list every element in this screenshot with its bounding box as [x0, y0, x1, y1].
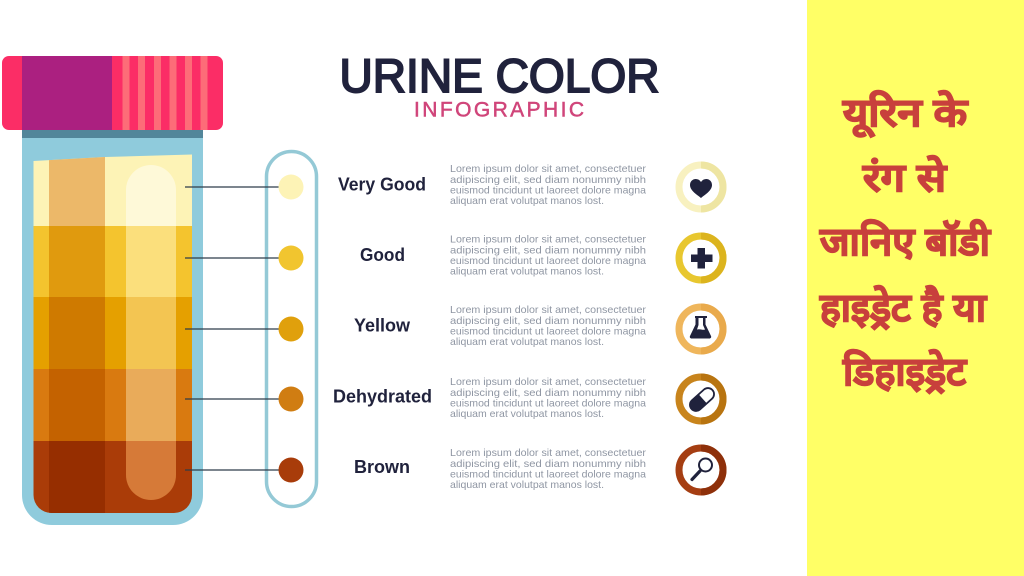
description: adipiscing elit, sed diam nonummy nibh	[450, 387, 646, 399]
jar lid	[2, 56, 223, 130]
description: euismod tincidunt ut laoreet dolore magna	[450, 468, 646, 480]
description: aliquam erat volutpat manos lost.	[450, 336, 604, 348]
description: Lorem ipsum dolor sit amet, consectetuer	[450, 376, 647, 388]
description: adipiscing elit, sed diam nonummy nibh	[450, 458, 646, 470]
row: Very Good	[338, 163, 647, 207]
liquid colour bands	[33, 150, 193, 514]
icon: magnifier	[679, 448, 723, 492]
description	[450, 163, 647, 207]
row: Very Good: Very Good	[338, 174, 426, 194]
hindi headline	[819, 90, 992, 394]
connector lines	[185, 187, 279, 470]
description	[450, 304, 647, 348]
title: URINE COLOR	[340, 49, 660, 102]
description: Lorem ipsum dolor sit amet, consectetuer	[450, 163, 647, 175]
hindi headline: यूरिन के	[842, 90, 969, 138]
description	[450, 376, 647, 420]
row: Brown: Brown	[354, 457, 410, 477]
description	[450, 447, 647, 491]
panel: specimen jar	[2, 56, 223, 525]
row: Dehydrated: Dehydrated	[333, 386, 432, 406]
description: Lorem ipsum dolor sit amet, consectetuer	[450, 234, 647, 246]
row: Good: Good	[360, 245, 405, 265]
hindi headline: डिहाइड्रेट	[842, 349, 967, 394]
row: Good	[360, 234, 647, 278]
row: Brown	[354, 447, 647, 491]
description: euismod tincidunt ut laoreet dolore magna	[450, 255, 646, 267]
hindi headline: हाइड्रेट है या	[819, 285, 988, 330]
panel: colour scale pill	[185, 152, 316, 506]
description	[450, 234, 647, 278]
description: aliquam erat volutpat manos lost.	[450, 195, 604, 207]
description: aliquam erat volutpat manos lost.	[450, 408, 604, 420]
icon: flask	[679, 307, 723, 351]
colour dots	[278, 174, 304, 482]
description: Lorem ipsum dolor sit amet, consectetuer	[450, 447, 647, 459]
liquid highlight	[126, 165, 176, 500]
icon: heart	[679, 165, 723, 209]
description: Lorem ipsum dolor sit amet, consectetuer	[450, 304, 647, 316]
description: aliquam erat volutpat manos lost.	[450, 266, 604, 278]
jar neck	[22, 130, 203, 138]
row: Yellow: Yellow	[354, 316, 411, 336]
icon: plus	[679, 236, 723, 280]
description: adipiscing elit, sed diam nonummy nibh	[450, 315, 646, 327]
description: aliquam erat volutpat manos lost.	[450, 479, 604, 491]
subtitle: INFOGRAPHIC	[414, 98, 584, 122]
icon: capsule	[679, 377, 723, 421]
row: Yellow	[354, 304, 647, 348]
description: adipiscing elit, sed diam nonummy nibh	[450, 244, 646, 256]
description: euismod tincidunt ut laoreet dolore magna	[450, 398, 646, 410]
panel: yellow headline	[807, 0, 1024, 576]
description: euismod tincidunt ut laoreet dolore magna	[450, 184, 646, 196]
jar body	[22, 135, 203, 525]
hindi headline: रंग से	[862, 155, 948, 200]
description: adipiscing elit, sed diam nonummy nibh	[450, 174, 646, 186]
hindi headline: जानिए बॉडी	[819, 219, 992, 264]
description: euismod tincidunt ut laoreet dolore magna	[450, 326, 646, 338]
row: Dehydrated	[333, 376, 647, 420]
